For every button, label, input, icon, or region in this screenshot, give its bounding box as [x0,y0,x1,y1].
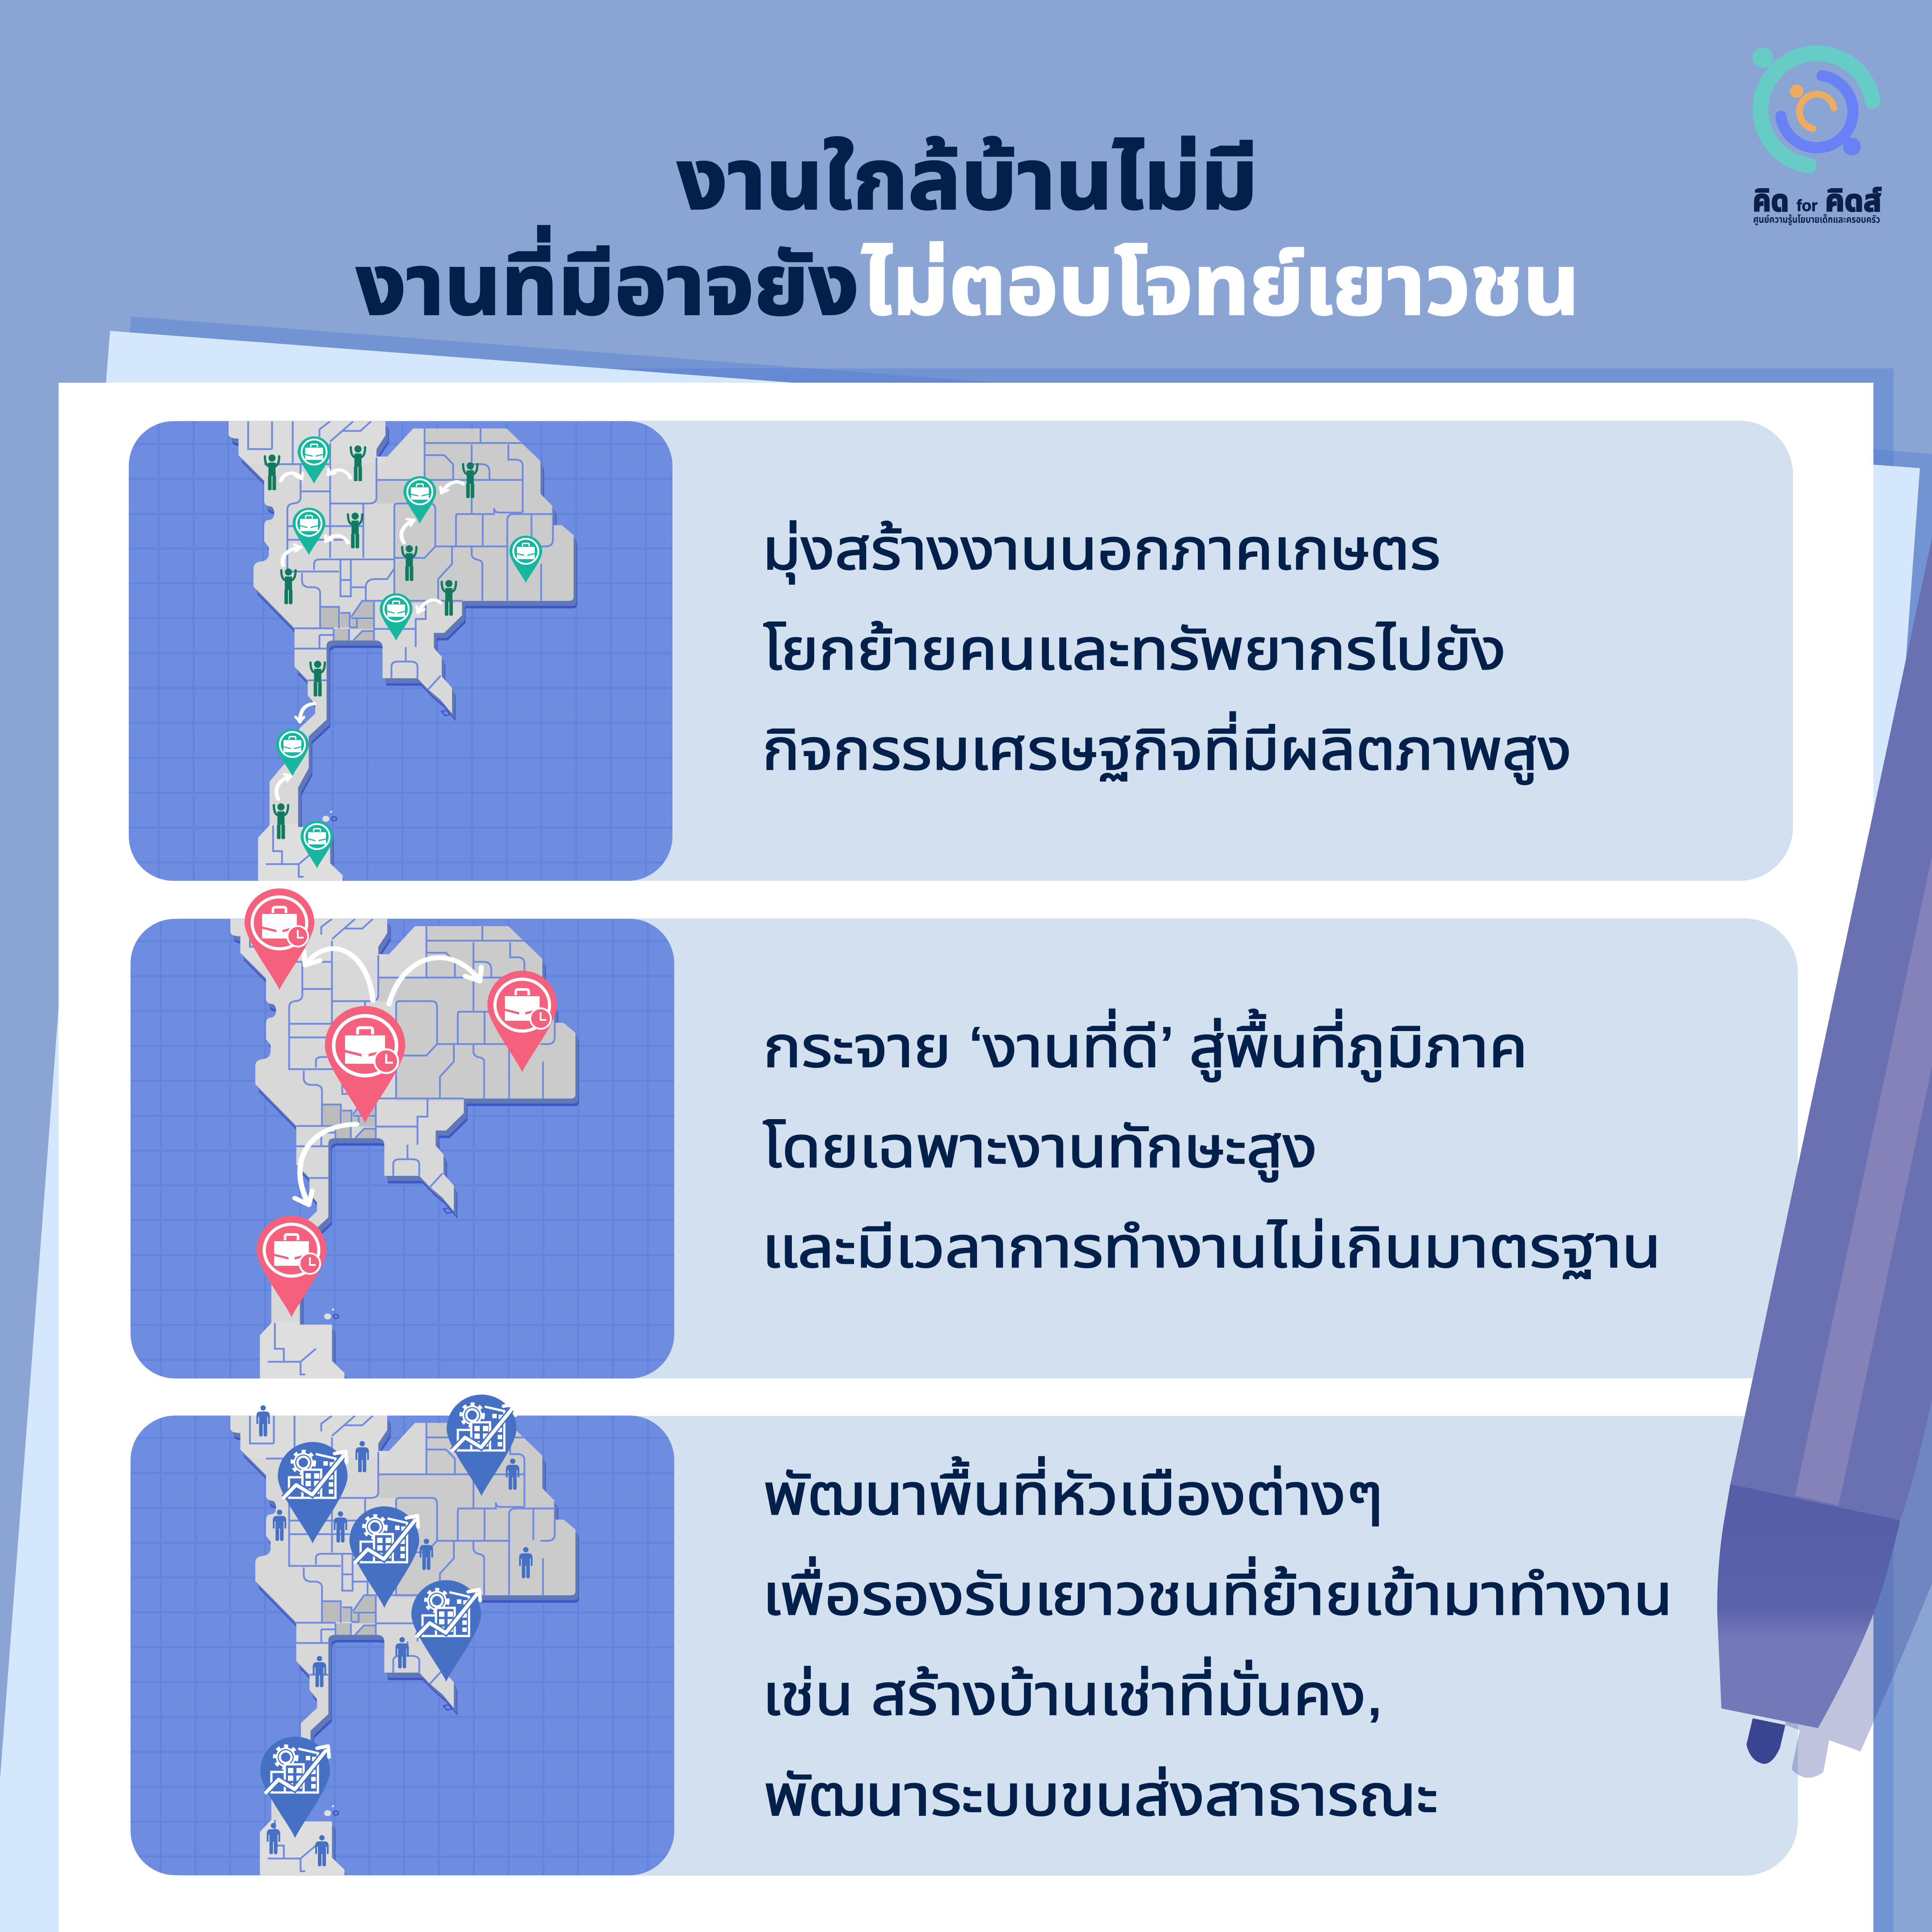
panel 2 text: โดยเฉพาะงานทักษะสูง [763,1116,1317,1182]
logo [1753,47,1881,225]
panel 3 text: พัฒนาระบบขนส่งสาธารณะ [764,1764,1438,1828]
panel 3 map [131,1416,674,1875]
white main sheet [59,383,1873,1932]
panel 3: develop regional cities [91,1369,1798,1905]
panel 2 text: กระจาย ‘งานที่ดี’ สู่พื้นที่ภูมิภาค [763,1009,1528,1082]
title: ไม่ตอบโจทย์เยาวชน [862,238,1580,333]
pen illustration [1717,537,1932,1778]
logo subtitle: ศูนย์ความรู้นโยบายเด็กและครอบครัว [1753,214,1880,225]
panel 1 movement arrows [276,470,463,799]
panel 3 text: เพื่อรองรับเยาวชนที่ย้ายเข้ามาทำงาน [762,1556,1673,1627]
panel 3 background [131,1416,1798,1876]
panel 3 people [257,1405,533,1866]
logo wordmark: for [1797,196,1818,215]
panel 3 text: พัฒนาพื้นที่หัวเมืองต่างๆ [763,1456,1383,1527]
panel 2 background [131,918,1798,1378]
pen nib [1746,1718,1785,1764]
title: งานใกล้บ้านไม่มี [677,132,1258,227]
panel 2 text: และมีเวลาการทำงานไม่เกินมาตรฐาน [762,1216,1661,1280]
panel 1 text: กิจกรรมเศรษฐกิจที่มีผลิตภาพสูง [762,711,1572,785]
panel 2 job pins [245,888,557,1317]
panel 2 arrows [300,949,480,1205]
panel 1 map [129,421,672,888]
panel 1 job pins [276,436,542,868]
panel 1: create non-farm jobs [129,421,1793,888]
logo wordmark [1753,184,1881,218]
panel 2 map [131,919,674,1378]
panel 3 text [762,1456,1673,1828]
panel 3 text: เช่น สร้างบ้านเช่าที่มั่นคง, [762,1657,1383,1727]
panel 1 text [762,518,1572,785]
logo wordmark: คิด [1753,184,1789,218]
pen shadow [1785,1386,1932,1778]
logo wordmark: คิดส์ [1825,184,1881,218]
panel 1 background [129,421,1793,881]
title: งานที่มีอาจยัง [356,225,859,333]
panel 1 workers [265,445,478,839]
panel 2 text [762,1009,1661,1280]
panel 1 text: มุ่งสร้างงานนอกภาคเกษตร [762,518,1441,584]
logo mark [1753,47,1873,165]
panel 1 text: โยกย้ายคนและทรัพยากรไปยัง [763,618,1506,682]
pen highlight stripe [1795,856,1932,1505]
pen body [1730,537,1932,1520]
panel 3 city pins [260,1395,516,1838]
panel 2: distribute good jobs [91,888,1798,1417]
pen ferrule [1717,1484,1900,1728]
title [356,132,1580,333]
